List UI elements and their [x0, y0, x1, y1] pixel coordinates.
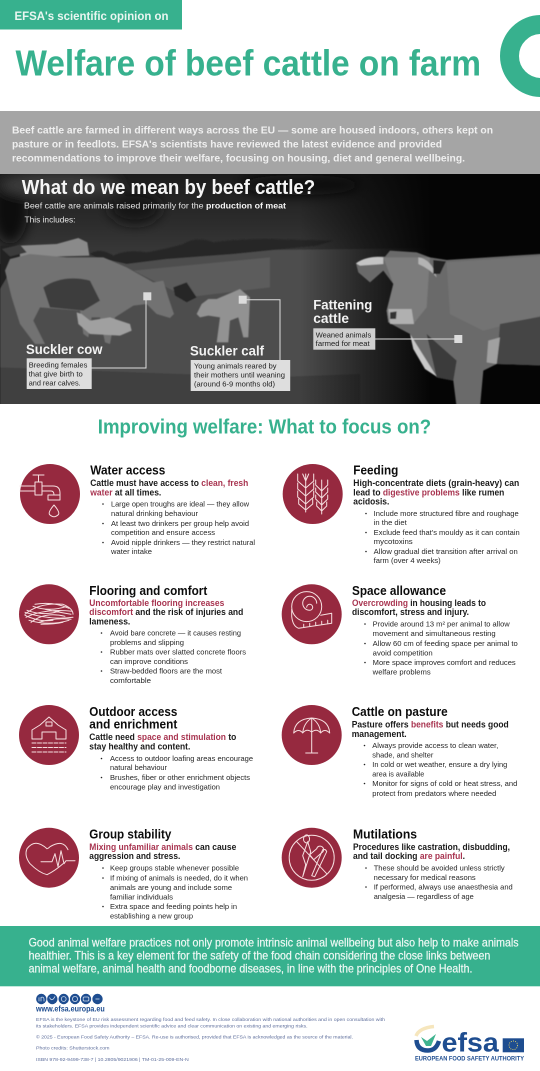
- callout: suckler calf: (around 6-9 months old): [194, 380, 275, 389]
- panel: cattle on pasture: protect from predators where needed: [372, 789, 496, 798]
- panel: flooring and comfort: [19, 584, 246, 685]
- website link: www.efsa.europa.eu: [35, 1004, 105, 1014]
- panel: water access: competition and ensure access: [111, 528, 215, 537]
- about EFSA small print: EFSA is the keystone of EU risk assessment regarding food and feed safety. In close collaboration with national authorities and in open consultation with: [36, 1017, 385, 1023]
- about EFSA small print: [36, 1017, 385, 1063]
- tag: scientific opinion: [0, 0, 182, 30]
- callout: fattening cattle: farmed for meat: [316, 339, 371, 348]
- panel: cattle on pasture: area is available: [372, 770, 424, 778]
- panel: mutilations: and tail docking are painful.: [353, 851, 465, 861]
- panel: flooring and comfort: can improve conditions: [110, 657, 188, 666]
- panel: water access: Large open troughs are ideal — they allow: [111, 500, 250, 508]
- definition text: Beef cattle are animals raised primarily for the production of meat: [24, 200, 286, 210]
- panel: feeding: lead to digestive problems like rumen: [353, 488, 504, 498]
- callout: suckler cow: that give birth to: [29, 370, 83, 379]
- panel: outdoor access and enrichment: Access to outdoor loafing areas encourage: [110, 754, 253, 763]
- panel: flooring and comfort: Avoid bare concrete — it causes resting: [110, 629, 241, 638]
- panel: group stability: aggression and stress.: [89, 851, 180, 861]
- intro band: Beef cattle are farmed in different ways across the EU — some are housed indoors, others kept on: [12, 124, 493, 136]
- panel: mutilations: If performed, always use anaesthesia and: [374, 882, 513, 892]
- panel: flooring and comfort: Flooring and comfort: [89, 584, 208, 598]
- panel: space allowance: [282, 584, 518, 676]
- panel: flooring and comfort: discomfort and the risk of injuries and: [89, 607, 243, 617]
- conclusion band: healthier. This is a key element for the safety of the food chain considering the close links between: [29, 949, 490, 962]
- callout: fattening cattle: Fattening: [313, 296, 372, 312]
- panel: outdoor access and enrichment: Cattle need space and stimulation to: [89, 732, 237, 742]
- panel: outdoor access and enrichment: [19, 705, 253, 792]
- panel: group stability: establishing a new group: [110, 912, 193, 920]
- panel: mutilations: [282, 827, 513, 901]
- intro band: [0, 111, 540, 174]
- EFSA logo: EUROPEAN FOOD SAFETY AUTHORITY: [415, 1056, 525, 1063]
- icon: wheat: [283, 464, 343, 524]
- panel: cattle on pasture: management.: [352, 729, 407, 739]
- panel: feeding: mycotoxins: [374, 537, 413, 546]
- heading: what do we mean by beef cattle: What do we mean by beef cattle?: [22, 177, 315, 199]
- panel: cattle on pasture: Always provide access to clean water,: [372, 741, 498, 750]
- social media icons: [36, 994, 103, 1004]
- panel: cattle on pasture: In cold or wet weather, ensure a dry lying: [372, 760, 507, 769]
- panel: mutilations: Procedures like castration, disbudding,: [353, 842, 510, 852]
- panel: feeding: High-concentrate diets (grain-heavy) can: [353, 478, 519, 488]
- panel: space allowance: Overcrowding in housing leads to: [352, 598, 487, 608]
- decorative ring: [510, 24, 540, 88]
- panel: group stability: animals are young and include some: [110, 883, 232, 892]
- panel: flooring and comfort: comfortable: [110, 676, 151, 685]
- panel: flooring and comfort: Straw-bedded floors are the most: [110, 666, 223, 676]
- panel: group stability: Keep groups stable whenever possible: [110, 864, 239, 873]
- panel: water access: [20, 464, 255, 556]
- panel: feeding: Include more structured fibre and roughage: [374, 509, 519, 518]
- panel: space allowance: discomfort, stress and injury.: [352, 607, 469, 617]
- panel: space allowance: Allow 60 cm of feeding space per animal to: [373, 639, 518, 648]
- panel: feeding: Feeding: [353, 464, 398, 478]
- panel: flooring and comfort: Rubber mats over slatted concrete floors: [110, 648, 246, 656]
- panel: cattle on pasture: Monitor for signs of cold or heat stress, and: [372, 779, 517, 788]
- panel: space allowance: More space improves comfort and reduces: [373, 658, 516, 667]
- panel: feeding: Exclude feed that's mouldy as it can contain: [374, 528, 520, 537]
- panel: outdoor access and enrichment: stay healthy and content.: [89, 742, 190, 752]
- conclusion band: [0, 926, 540, 986]
- conclusion band: animal welfare, animal health and foodborne diseases, in line with the principles of One Health.: [29, 962, 472, 975]
- callout: suckler calf: [190, 296, 290, 391]
- panel: water access: water intake: [110, 547, 152, 556]
- callout: fattening cattle: Weaned animals: [316, 330, 371, 339]
- panel: feeding: in the diet: [374, 518, 408, 527]
- panel: group stability: Group stability: [89, 827, 171, 841]
- callout: suckler cow: and rear calves.: [29, 379, 81, 388]
- icon: measuring tape: [282, 584, 342, 644]
- icon: straw bedding: [19, 584, 79, 644]
- panel: water access: Avoid nipple drinkers — they restrict natural: [111, 538, 255, 547]
- callout: suckler cow: Breeding females: [29, 361, 88, 370]
- panel: space allowance: movement and simultaneous resting: [373, 629, 496, 638]
- panel: water access: natural drinking behaviour: [111, 509, 198, 518]
- about EFSA small print: Photo credits: Shutterstock.com: [36, 1045, 110, 1051]
- panel: group stability: If mixing of animals is needed, do it when: [110, 874, 248, 883]
- tag: scientific opinion: EFSA's scientific opinion on: [14, 11, 168, 23]
- intro band: recommendations to improve their welfare, focusing on housing, diet and general wellbeing.: [12, 152, 465, 164]
- icon: crossed-out scissors: [282, 828, 342, 888]
- title: Welfare of beef cattle on farm: [16, 42, 481, 83]
- panel: space allowance: Space allowance: [352, 584, 446, 598]
- panel: outdoor access and enrichment: and enrichment: [89, 718, 178, 732]
- panel: group stability: Extra space and feeding points help in: [110, 902, 237, 911]
- about EFSA small print: its stakeholders. EFSA provides independent scientific advice and clear communication on existing and emerging risks.: [36, 1024, 308, 1030]
- panel: water access: water at all times.: [89, 488, 161, 498]
- callout: suckler cow: [26, 292, 151, 389]
- callout: fattening cattle: [313, 296, 462, 350]
- panel: mutilations: These should be avoided unless strictly: [374, 864, 505, 873]
- panel: mutilations: analgesia — regardless of age: [374, 892, 474, 901]
- icon: parasol: [282, 705, 342, 765]
- panel: feeding: farm (over 4 weeks): [374, 556, 441, 565]
- panel: outdoor access and enrichment: Outdoor access: [89, 705, 177, 719]
- EFSA logo: [415, 1026, 525, 1063]
- photo panel: beef cattle types: [0, 173, 540, 407]
- icon: heart with pulse: [19, 828, 79, 888]
- callout: fattening cattle: cattle: [313, 310, 349, 326]
- heading: improving welfare: Improving welfare: What to focus on?: [98, 417, 431, 439]
- callout: suckler calf: Suckler calf: [190, 343, 264, 359]
- about EFSA small print: ISBN 978-92-9499-738-7 | 10.2805/9021906 | TM-01-25-009-EN-N: [36, 1057, 189, 1063]
- panel: space allowance: avoid competition: [373, 648, 433, 658]
- panel: feeding: [283, 464, 520, 565]
- panel: outdoor access and enrichment: encourage play and investigation: [110, 782, 220, 792]
- panel: mutilations: Mutilations: [353, 827, 417, 841]
- panel: feeding: acidosis.: [353, 497, 389, 507]
- panel: group stability: familiar individuals: [110, 892, 173, 902]
- panel: mutilations: necessary for medical reasons: [374, 873, 476, 882]
- panel: space allowance: welfare problems: [372, 668, 431, 676]
- intro band: pasture or in feedlots. EFSA's scientists have reviewed the latest evidence and provided: [12, 138, 442, 150]
- panel: cattle on pasture: Cattle on pasture: [352, 705, 448, 719]
- panel: cattle on pasture: [282, 705, 517, 798]
- panel: feeding: Allow gradual diet transition after arrival on: [374, 547, 518, 556]
- panel: group stability: [19, 827, 248, 920]
- about EFSA small print: © 2025 - European Food Safety Authority – EFSA. Re-use is authorised, provided that EFSA is acknowledged as the source of the material.: [36, 1034, 353, 1041]
- icon: barn: [19, 705, 79, 765]
- panel: cattle on pasture: shade, and shelter: [372, 750, 434, 760]
- panel: space allowance: Provide around 13 m² per animal to allow: [373, 620, 510, 629]
- EFSA logo: efsa: [442, 1028, 500, 1058]
- callout: suckler calf: Young animals reared by: [194, 362, 277, 371]
- panel: outdoor access and enrichment: natural behaviour: [110, 763, 167, 772]
- panel: group stability: Mixing unfamiliar animals can cause: [89, 842, 236, 852]
- includes text: This includes:: [24, 215, 76, 225]
- panel: flooring and comfort: lameness.: [89, 616, 130, 626]
- icon: water tap: [20, 464, 80, 524]
- panel: cattle on pasture: Pasture offers benefits but needs good: [352, 719, 509, 729]
- panel: water access: At least two drinkers per group help avoid: [111, 519, 249, 528]
- photo: cattle in a field: [0, 173, 540, 407]
- panel: water access: Water access: [90, 464, 165, 478]
- callout: suckler cow: Suckler cow: [26, 341, 103, 357]
- panel: water access: Cattle must have access to clean, fresh: [90, 478, 248, 488]
- panel: flooring and comfort: problems and slipping: [110, 638, 184, 647]
- callout: suckler calf: their mothers until weaning: [194, 371, 285, 380]
- panel: flooring and comfort: Uncomfortable flooring increases: [89, 598, 224, 608]
- panel: outdoor access and enrichment: Brushes, fiber or other enrichment objects: [110, 773, 250, 782]
